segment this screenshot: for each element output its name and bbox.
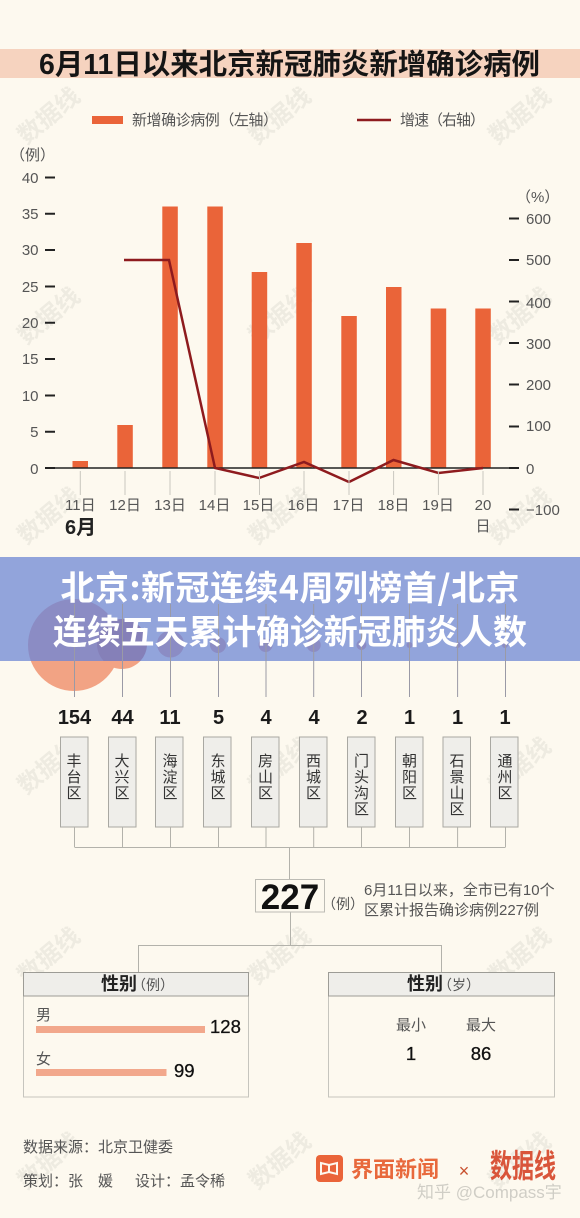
district boxes: 头 <box>354 769 369 786</box>
watermarks: 数据线 <box>244 1128 316 1195</box>
district boxes: 区 <box>114 785 130 802</box>
panel: gender: 128 <box>210 1016 241 1037</box>
proportional circles <box>28 599 147 691</box>
legend: 新增确诊病例（左轴） <box>132 112 278 129</box>
district counts: 1 <box>404 707 415 729</box>
times sign: × <box>459 1161 469 1181</box>
district boxes: 石 <box>449 753 465 770</box>
source and credits <box>23 1139 225 1190</box>
total: 区累计报告确诊病例227例 <box>364 902 539 919</box>
district boxes: 西 <box>306 753 321 770</box>
panel: gender: 99 <box>174 1060 195 1081</box>
right axis <box>509 189 560 519</box>
district boxes: 区 <box>66 785 82 802</box>
left axis: 20 <box>22 315 38 332</box>
district boxes: 房 <box>258 753 273 770</box>
district boxes: 大 <box>114 753 130 770</box>
district boxes: 区 <box>402 785 417 802</box>
source and credits: 数据来源： <box>23 1139 98 1156</box>
district boxes: 景 <box>449 769 465 786</box>
district counts: 1 <box>452 707 463 729</box>
district boxes: 区 <box>258 785 273 802</box>
panel: age: 性别 <box>407 974 443 994</box>
panel: age <box>328 972 554 1097</box>
watermarks: 数据线 <box>244 923 316 990</box>
source and credits: 张 <box>68 1173 83 1190</box>
district boxes: 区 <box>354 801 369 818</box>
title: 6月11日以来北京新冠肺炎新增确诊病例 <box>39 49 540 81</box>
growth line <box>124 260 483 482</box>
total: 6月11日以来，全市已有10个 <box>364 881 555 899</box>
panel: gender: 女 <box>36 1050 51 1068</box>
banner headline: 连续五天累计确诊新冠肺炎人数 <box>53 605 527 654</box>
left axis: 40 <box>22 170 38 187</box>
watermarks: 数据线 <box>484 1128 556 1195</box>
panel: gender: （例） <box>132 977 174 993</box>
source and credits: 孟令稀 <box>180 1173 225 1190</box>
district boxes: 区 <box>497 785 513 802</box>
leader lines <box>74 604 506 697</box>
date labels: 15日 <box>243 497 274 514</box>
panel: age: （岁） <box>438 977 480 993</box>
date labels: 日 <box>475 518 491 535</box>
total <box>256 878 555 919</box>
watermarks: 数据线 <box>244 483 316 550</box>
date labels: 12日 <box>109 497 141 514</box>
district boxes: 兴 <box>114 769 130 786</box>
district counts: 11 <box>159 707 181 729</box>
total: （例） <box>322 896 364 912</box>
watermarks: 数据线 <box>484 283 556 350</box>
total: 227 <box>261 878 319 917</box>
zhihu watermark: 知乎 @Compass宇 <box>417 1183 562 1202</box>
district boxes: 东 <box>210 753 226 770</box>
district counts: 44 <box>111 707 134 729</box>
brand: data line: 数据线 <box>490 1148 556 1184</box>
watermarks: 数据线 <box>13 83 85 150</box>
source and credits: 策划： <box>23 1173 68 1190</box>
legend: 增速（右轴） <box>400 112 485 129</box>
watermarks: 数据线 <box>484 83 556 150</box>
left axis: 0 <box>30 461 38 478</box>
right axis: 400 <box>526 295 551 312</box>
date labels: 17日 <box>333 497 364 514</box>
watermarks: 数据线 <box>484 733 556 800</box>
district boxes <box>60 737 518 827</box>
district boxes: 区 <box>449 801 465 818</box>
right axis: 100 <box>526 418 551 435</box>
date labels <box>65 471 491 539</box>
watermarks: 数据线 <box>13 923 85 990</box>
district boxes: 台 <box>66 769 82 786</box>
right axis: （%） <box>516 189 559 206</box>
source and credits: 北京卫健委 <box>98 1139 173 1156</box>
watermarks: 数据线 <box>13 1128 85 1195</box>
watermarks: 数据线 <box>13 283 85 350</box>
district boxes: 阳 <box>402 769 417 786</box>
right axis: 300 <box>526 336 551 353</box>
left axis <box>10 147 55 478</box>
date labels: 11日 <box>65 497 96 514</box>
panel: age: 最小 <box>396 1017 426 1034</box>
watermarks: 数据线 <box>13 483 85 550</box>
district boxes: 朝 <box>402 753 417 770</box>
district boxes: 丰 <box>66 753 82 770</box>
legend <box>92 112 485 129</box>
watermarks: 数据线 <box>244 83 316 150</box>
right axis: −100 <box>526 502 560 519</box>
date labels: 19日 <box>422 497 454 514</box>
left axis: （例） <box>10 147 55 164</box>
right axis: 0 <box>526 461 534 478</box>
watermarks: 数据线 <box>484 483 556 550</box>
icon: jiemian logo <box>316 1155 343 1182</box>
date labels: 13日 <box>154 497 186 514</box>
district counts: 4 <box>260 707 272 729</box>
district boxes: 区 <box>162 785 178 802</box>
right axis: 200 <box>526 377 551 394</box>
right axis: 600 <box>526 211 551 228</box>
left axis: 25 <box>22 279 38 296</box>
date labels: 6月 <box>65 517 96 539</box>
panel: gender <box>24 972 248 1097</box>
district boxes: 沟 <box>354 785 369 802</box>
bar chart <box>72 206 491 468</box>
source and credits: 媛 <box>98 1173 113 1190</box>
district boxes: 通 <box>497 753 513 770</box>
watermarks: 数据线 <box>484 923 556 990</box>
baseline <box>55 467 518 469</box>
district boxes: 山 <box>449 785 465 802</box>
connector lines <box>74 827 506 972</box>
left axis: 35 <box>22 206 38 223</box>
panel: age: 86 <box>471 1043 491 1064</box>
date labels: 14日 <box>199 497 230 514</box>
district counts: 5 <box>213 707 224 729</box>
source and credits: 设计： <box>135 1173 180 1190</box>
district counts: 2 <box>356 707 368 729</box>
district counts: 4 <box>308 707 320 729</box>
district boxes: 门 <box>354 753 369 770</box>
panel: age: 1 <box>406 1043 416 1064</box>
district boxes: 州 <box>497 769 513 786</box>
watermarks: 数据线 <box>244 733 316 800</box>
panel: gender: 男 <box>36 1007 51 1024</box>
district boxes: 区 <box>306 785 321 802</box>
watermarks: 数据线 <box>13 733 85 800</box>
district boxes: 淀 <box>162 769 178 786</box>
district counts: 154 <box>58 707 92 729</box>
district boxes: 山 <box>258 769 273 786</box>
district boxes: 区 <box>210 785 226 802</box>
district boxes: 海 <box>162 753 178 770</box>
right axis: 500 <box>526 252 551 269</box>
banner headline <box>53 561 527 654</box>
date labels: 18日 <box>378 497 409 514</box>
district counts: 1 <box>499 707 511 729</box>
panel: gender: 性别 <box>101 974 137 994</box>
left axis: 5 <box>30 424 38 441</box>
left axis: 15 <box>22 351 38 368</box>
left axis: 30 <box>22 242 38 259</box>
brand: jiemian news: 界面新闻 <box>351 1157 439 1182</box>
watermarks: 数据线 <box>244 283 316 350</box>
left axis: 10 <box>22 388 38 405</box>
unit label behind banner: （例） <box>532 569 577 586</box>
banner headline: 北京:新冠连续4周列榜首/北京 <box>60 561 520 610</box>
banner <box>0 557 580 661</box>
panel: age: 最大 <box>466 1017 496 1034</box>
date labels: 20 <box>475 497 491 514</box>
district counts <box>58 707 511 729</box>
district boxes: 城 <box>210 769 226 786</box>
date labels: 16日 <box>288 497 319 514</box>
district boxes: 城 <box>306 769 321 786</box>
